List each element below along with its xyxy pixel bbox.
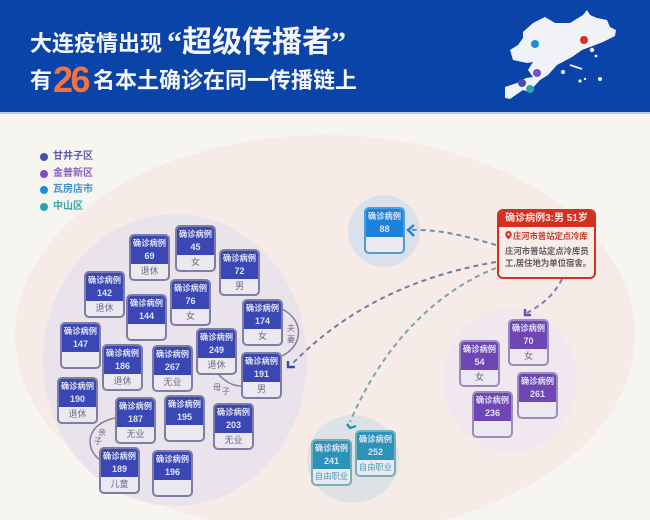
arrow: to Ganjingzi cluster — [288, 262, 496, 367]
case card 187: 无业 — [126, 429, 144, 439]
source case card: case 3 — [497, 209, 596, 279]
legend item: Ganjingzi: 甘井子区 — [53, 151, 93, 162]
case card 191: 男 — [257, 384, 266, 394]
arrow: to case 88 — [408, 225, 496, 245]
legend item: Jinpu: 金普新区 — [53, 168, 93, 179]
case card 174: 174 — [255, 316, 270, 326]
case card 196 — [152, 450, 193, 497]
case card 70: 70 — [523, 336, 534, 346]
case card 186: 确诊病例 — [106, 348, 139, 358]
Zhongshan cluster circle — [307, 415, 399, 503]
arrow: to Jinpu cluster — [525, 279, 562, 315]
relation labels: 子 — [94, 437, 102, 446]
case card 190 — [57, 377, 98, 424]
case card 195: 195 — [177, 412, 192, 422]
case card 187 — [115, 397, 156, 444]
case card 147: 确诊病例 — [64, 326, 97, 336]
case card 241: 自由职业 — [315, 471, 348, 481]
case card 142: 确诊病例 — [88, 275, 121, 285]
case card 249: 退休 — [207, 360, 226, 370]
case card 189: 儿童 — [110, 479, 128, 489]
legend item: Zhongshan — [40, 200, 83, 212]
case card 54 — [459, 340, 500, 387]
case card 88: 确诊病例 — [368, 211, 401, 221]
case card 88: 88 — [379, 224, 390, 234]
marker: Zhuanghe — [580, 36, 588, 44]
relation labels: 妻 — [287, 334, 295, 344]
case card 195 — [164, 395, 205, 442]
case card 252: 确诊病例 — [359, 434, 392, 444]
case card 72: 确诊病例 — [223, 253, 256, 263]
title line 1 — [30, 26, 346, 59]
title line 2: 名本土确诊在同一传播链上 — [93, 68, 357, 93]
case card 142: 退休 — [95, 303, 114, 313]
case card 76: 女 — [186, 311, 195, 321]
case card 69 — [129, 234, 170, 281]
case card 174: 女 — [258, 331, 267, 341]
case card 191 — [241, 352, 282, 399]
case card 241: 241 — [324, 456, 339, 466]
case card 54: 54 — [474, 356, 484, 366]
case card 69: 确诊病例 — [133, 238, 166, 248]
Wafangdian cluster circle — [348, 195, 420, 267]
relation labels: 子 — [222, 387, 230, 396]
title line 1: ” — [331, 26, 346, 59]
case card 196: 196 — [165, 466, 180, 476]
case card 54: 女 — [475, 372, 484, 382]
case card 252 — [355, 430, 396, 477]
case 3 heading: 确诊病例3:男 51岁 — [505, 213, 588, 224]
case card 147 — [60, 322, 101, 369]
relation arc: couple — [282, 309, 298, 356]
relation arc: parent and child — [90, 418, 115, 460]
case card 144: 确诊病例 — [130, 298, 163, 308]
case card 45 — [175, 225, 216, 272]
legend item: Wafangdian — [40, 183, 93, 195]
title line 1: “ — [167, 26, 182, 59]
case card 70: 确诊病例 — [512, 323, 545, 333]
case card 72: 男 — [235, 281, 244, 291]
case card 187: 187 — [128, 414, 143, 424]
case card 45: 45 — [190, 242, 200, 252]
case card 191: 191 — [254, 368, 269, 378]
case card 195: 确诊病例 — [168, 399, 201, 409]
case card 203: 无业 — [224, 435, 242, 445]
large pink oval — [15, 135, 635, 520]
case card 147: 147 — [73, 338, 88, 348]
case card 249: 249 — [209, 344, 224, 354]
case card 267: 确诊病例 — [156, 349, 189, 359]
Ganjingzi cluster circle — [43, 214, 307, 506]
case card 191: 确诊病例 — [245, 356, 278, 366]
title line 1: 超级传播者 — [182, 26, 332, 59]
case card 142 — [84, 271, 125, 318]
case card 249: 确诊病例 — [200, 332, 233, 342]
case card 70 — [508, 319, 549, 366]
case card 261: 确诊病例 — [521, 376, 554, 386]
case card 203: 确诊病例 — [217, 407, 250, 417]
case card 267: 无业 — [163, 377, 182, 387]
case card 76 — [170, 279, 211, 326]
case card 144: 144 — [139, 310, 154, 320]
case card 196: 确诊病例 — [156, 454, 189, 464]
case card 203: 203 — [226, 420, 241, 430]
case card 186 — [102, 344, 143, 391]
case card 69: 退休 — [140, 266, 158, 276]
legend — [40, 150, 93, 212]
case card 190: 190 — [70, 394, 85, 404]
case card 142: 142 — [97, 288, 112, 298]
marker: Zhongshan — [526, 85, 534, 93]
case card 144 — [126, 294, 167, 341]
case card 190: 确诊病例 — [61, 381, 94, 391]
case card 261 — [517, 372, 558, 419]
case card 76: 76 — [185, 296, 196, 306]
case card 174 — [242, 299, 283, 346]
case card 174: 确诊病例 — [246, 303, 279, 313]
map of Dalian with district markers — [505, 10, 616, 99]
case card 187: 确诊病例 — [119, 401, 152, 411]
legend item: Ganjingzi — [40, 150, 93, 162]
case card 54: 确诊病例 — [463, 344, 496, 354]
title line 1: 大连疫情出现 — [30, 31, 162, 56]
legend item: Jinpu — [40, 167, 93, 179]
case card 252: 252 — [368, 446, 383, 456]
case 3 description: 庄河市普站定点冷库员 — [505, 246, 589, 256]
relation labels: 夫 — [287, 323, 295, 333]
case card 189: 确诊病例 — [103, 451, 136, 461]
case 3 location: 庄河市普站定点冷库 — [513, 231, 588, 241]
Jinpu cluster circle — [443, 308, 577, 452]
marker: Ganjingzi — [518, 79, 526, 87]
case card 267 — [152, 345, 193, 392]
relation labels — [94, 323, 295, 446]
case card 241 — [311, 439, 352, 486]
case card 45: 女 — [191, 257, 200, 267]
case card 76: 确诊病例 — [174, 283, 207, 293]
case card 261: 261 — [530, 388, 545, 398]
relation labels: 母 — [213, 383, 221, 392]
case card 45: 确诊病例 — [179, 229, 212, 239]
case card 236: 确诊病例 — [476, 395, 509, 405]
case card 267: 267 — [165, 362, 180, 372]
case card 189 — [99, 447, 140, 494]
case card 249 — [196, 328, 237, 375]
case 3 heading — [498, 210, 595, 227]
case card 69: 69 — [144, 250, 154, 260]
title line 2: 26 — [53, 59, 88, 100]
legend item: Zhongshan: 中山区 — [53, 201, 83, 212]
marker: Jinpu — [533, 69, 541, 77]
case card 70: 女 — [524, 351, 533, 361]
case card 236: 236 — [485, 408, 500, 418]
case card 72 — [219, 249, 260, 296]
case 3 description — [505, 246, 591, 268]
title line 2 — [30, 59, 357, 100]
case card 190: 退休 — [68, 409, 86, 419]
marker: Wafangdian — [531, 40, 539, 48]
case card 252: 自由职业 — [359, 462, 392, 472]
relation labels: 亲 — [98, 427, 106, 437]
case 3 description: 工,居住地为单位宿舍。 — [505, 258, 591, 268]
title line 2: 有 — [30, 68, 52, 93]
case card 189: 189 — [112, 464, 127, 474]
legend item: Wafangdian: 瓦房店市 — [53, 184, 93, 195]
arrow: to Zhongshan cluster — [347, 268, 496, 428]
case card 186: 186 — [115, 360, 130, 370]
case card 72: 72 — [234, 266, 244, 276]
relation arc: mother and son — [218, 374, 242, 386]
header band — [0, 0, 650, 114]
case card 241: 确诊病例 — [315, 443, 348, 453]
case card 186: 退休 — [113, 376, 132, 386]
case card 236 — [472, 391, 513, 438]
case card 203 — [213, 403, 254, 450]
case card 88 — [364, 207, 405, 254]
